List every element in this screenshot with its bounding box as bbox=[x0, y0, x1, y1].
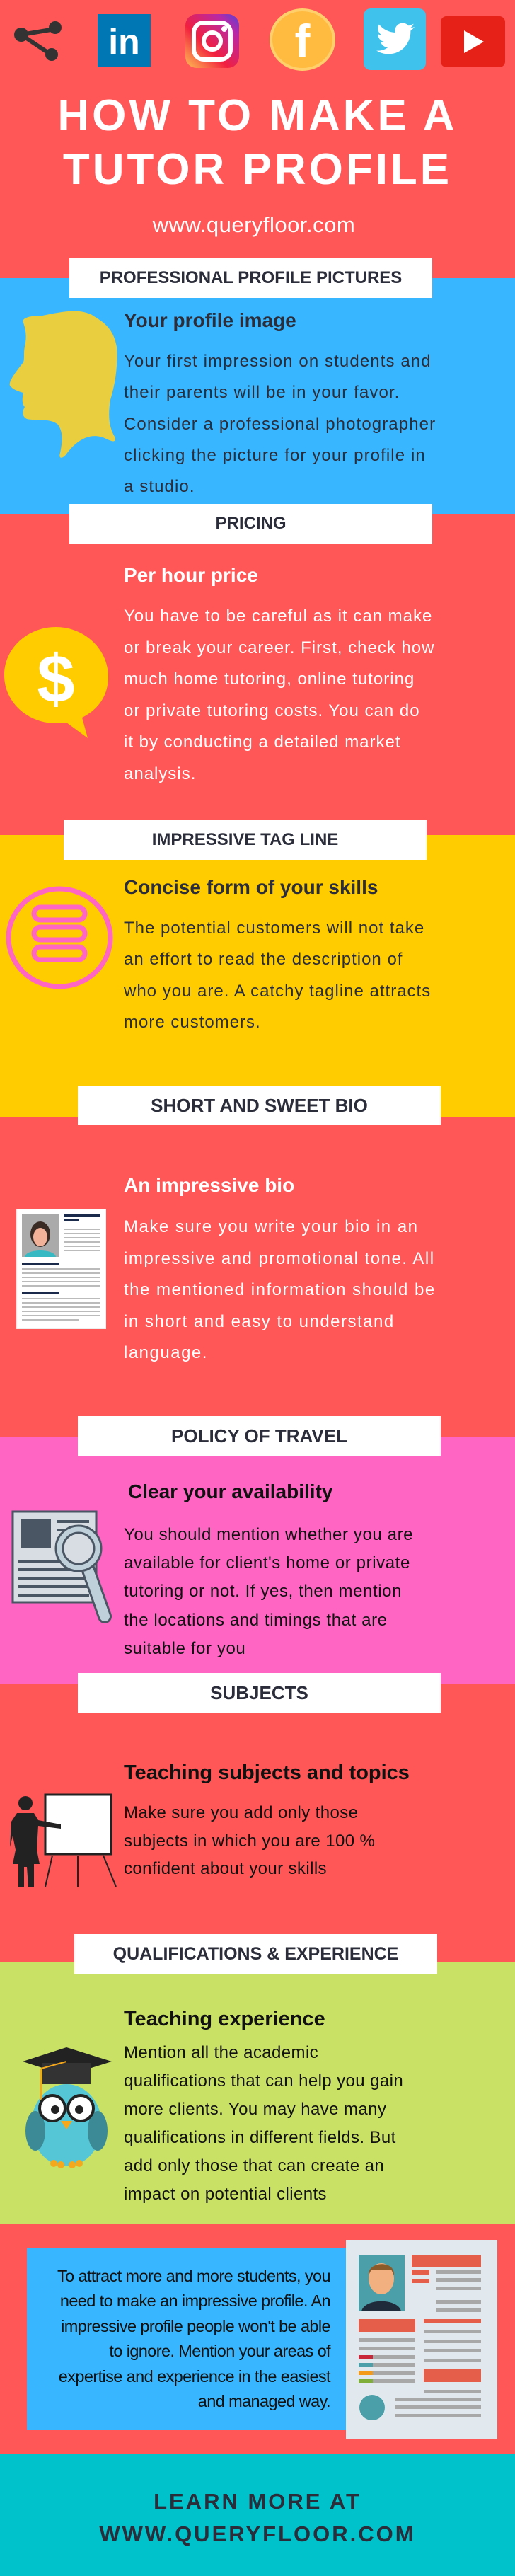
subtitle: Teaching experience bbox=[124, 2008, 325, 2030]
background band: red pricing bbox=[0, 514, 515, 835]
body text: tutoring or not. If yes, then mention bbox=[124, 1582, 402, 1601]
icon: facebook bbox=[270, 8, 335, 71]
body text: analysis. bbox=[124, 764, 196, 783]
background band: header red bbox=[0, 0, 515, 278]
body text: the mentioned information should be bbox=[124, 1280, 436, 1299]
heading: SHORT AND SWEET BIO bbox=[151, 1095, 368, 1116]
body text: You have to be careful as it can make bbox=[124, 606, 432, 626]
panel: qualifications and experience bbox=[23, 1934, 437, 2204]
icon: bio document bbox=[16, 1209, 106, 1329]
body text: a studio. bbox=[124, 477, 195, 496]
body text: who you are. A catchy tagline attracts bbox=[124, 982, 431, 1001]
panel: summary callout bbox=[27, 2240, 497, 2439]
footer call to action: WWW.QUERYFLOOR.COM bbox=[99, 2522, 416, 2546]
icon: dollar speech bubble bbox=[4, 627, 108, 738]
body text bbox=[124, 1217, 436, 1362]
body text: confident about your skills bbox=[124, 1859, 327, 1878]
callout text box: expertise and experience in the easiest bbox=[59, 2367, 330, 2386]
icon: instagram bbox=[185, 14, 239, 68]
body text: Make sure you add only those bbox=[124, 1803, 358, 1822]
title: TUTOR PROFILE bbox=[63, 145, 452, 194]
icon: facebook: f bbox=[294, 15, 310, 67]
heading bbox=[78, 1086, 441, 1125]
background band: pink bbox=[0, 1437, 515, 1684]
heading bbox=[74, 1934, 437, 1974]
body text: impact on potential clients bbox=[124, 2185, 327, 2204]
subtitle: Your profile image bbox=[124, 309, 296, 331]
body text: much home tutoring, online tutoring bbox=[124, 669, 415, 689]
subtitle url: www.queryfloor.com bbox=[153, 212, 355, 237]
body text: language. bbox=[124, 1343, 208, 1362]
icon: list circle bbox=[6, 886, 113, 989]
body text: clicking the picture for your profile in bbox=[124, 446, 426, 465]
body text: or break your career. First, check how bbox=[124, 638, 434, 657]
body text: Consider a professional photographer bbox=[124, 415, 436, 434]
footer call to action: LEARN MORE AT bbox=[154, 2489, 361, 2514]
body text: an effort to read the description of bbox=[124, 950, 403, 969]
heading bbox=[69, 504, 432, 544]
body text bbox=[124, 919, 431, 1032]
body text: Mention all the academic bbox=[124, 2043, 318, 2062]
icon: teacher with board bbox=[10, 1793, 117, 1887]
callout text box: impressive profile people won't be able bbox=[61, 2317, 330, 2335]
icon: share bbox=[14, 21, 62, 61]
background band: blue bbox=[0, 278, 515, 514]
heading: SUBJECTS bbox=[210, 1682, 308, 1703]
background band: teal bbox=[0, 2454, 515, 2576]
icon: head silhouette bbox=[10, 311, 117, 458]
icon: graduate owl bbox=[23, 2047, 112, 2168]
subtitle: Teaching subjects and topics bbox=[124, 1761, 410, 1784]
body text: suitable for you bbox=[124, 1639, 245, 1658]
body text bbox=[124, 352, 436, 496]
panel: pricing bbox=[4, 504, 434, 783]
heading: PROFESSIONAL PROFILE PICTURES bbox=[100, 268, 402, 287]
title bbox=[57, 91, 458, 194]
body text bbox=[124, 606, 434, 783]
body text: their parents will be in your favor. bbox=[124, 383, 400, 402]
subtitle: An impressive bio bbox=[124, 1174, 294, 1196]
body text: the locations and timings that are bbox=[124, 1611, 388, 1630]
heading bbox=[69, 258, 432, 298]
background band: yellow bbox=[0, 835, 515, 1117]
body text: You should mention whether you are bbox=[124, 1525, 413, 1544]
background band: red bio bbox=[0, 1117, 515, 1437]
icon: twitter bbox=[364, 8, 426, 70]
body text: Make sure you write your bio in an bbox=[124, 1217, 419, 1236]
icon: dollar speech bubble: $ bbox=[37, 641, 75, 717]
callout text box: to ignore. Mention your areas of bbox=[109, 2342, 330, 2360]
body text: qualifications that can help you gain bbox=[124, 2071, 403, 2091]
subtitle: Per hour price bbox=[124, 564, 258, 586]
heading bbox=[78, 1416, 441, 1456]
panel: professional profile pictures bbox=[10, 258, 436, 496]
body text: more customers. bbox=[124, 1013, 261, 1032]
body text bbox=[124, 1803, 375, 1878]
callout text box bbox=[27, 2248, 346, 2430]
heading bbox=[64, 820, 427, 860]
body text: available for client's home or private bbox=[124, 1553, 410, 1572]
icon: linkedin bbox=[98, 14, 151, 67]
callout text box: and managed way. bbox=[198, 2392, 330, 2410]
subtitle: Clear your availability bbox=[128, 1480, 332, 1502]
body text: The potential customers will not take bbox=[124, 919, 424, 938]
body text: Your first impression on students and bbox=[124, 352, 432, 371]
background band: green bbox=[0, 1962, 515, 2224]
body text: or private tutoring costs. You can do bbox=[124, 701, 420, 720]
body text bbox=[124, 2043, 403, 2204]
body text: qualifications in different fields. But bbox=[124, 2128, 396, 2147]
heading: IMPRESSIVE TAG LINE bbox=[152, 830, 338, 849]
footer call to action bbox=[99, 2489, 416, 2546]
title: HOW TO MAKE A bbox=[57, 91, 458, 140]
callout text box: To attract more and more students, you bbox=[57, 2267, 330, 2285]
heading: QUALIFICATIONS & EXPERIENCE bbox=[113, 1944, 398, 1964]
panel: impressive tag line bbox=[6, 820, 431, 1032]
body text bbox=[124, 1525, 413, 1658]
icon: linkedin: in bbox=[108, 22, 140, 62]
body text: it by conducting a detailed market bbox=[124, 732, 401, 752]
icon: resume card bbox=[346, 2240, 497, 2439]
icon: document with magnifier bbox=[11, 1510, 112, 1623]
social icons row bbox=[14, 8, 505, 71]
background band: red summary bbox=[0, 2224, 515, 2454]
callout text box: need to make an impressive profile. An bbox=[60, 2292, 330, 2310]
body text: in short and easy to understand bbox=[124, 1312, 395, 1330]
body text: add only those that can create an bbox=[124, 2156, 384, 2175]
heading: POLICY OF TRAVEL bbox=[171, 1425, 347, 1447]
body text: subjects in which you are 100 % bbox=[124, 1832, 375, 1850]
body text: impressive and promotional tone. All bbox=[124, 1248, 435, 1268]
body text: more clients. You may have many bbox=[124, 2100, 386, 2119]
heading bbox=[78, 1673, 441, 1713]
icon: youtube bbox=[441, 16, 505, 67]
panel: short and sweet bio bbox=[16, 1086, 441, 1362]
heading: PRICING bbox=[215, 514, 286, 533]
background band: red subjects bbox=[0, 1684, 515, 1962]
panel: policy of travel bbox=[11, 1416, 441, 1658]
panel: subjects bbox=[10, 1673, 441, 1887]
subtitle: Concise form of your skills bbox=[124, 876, 378, 898]
